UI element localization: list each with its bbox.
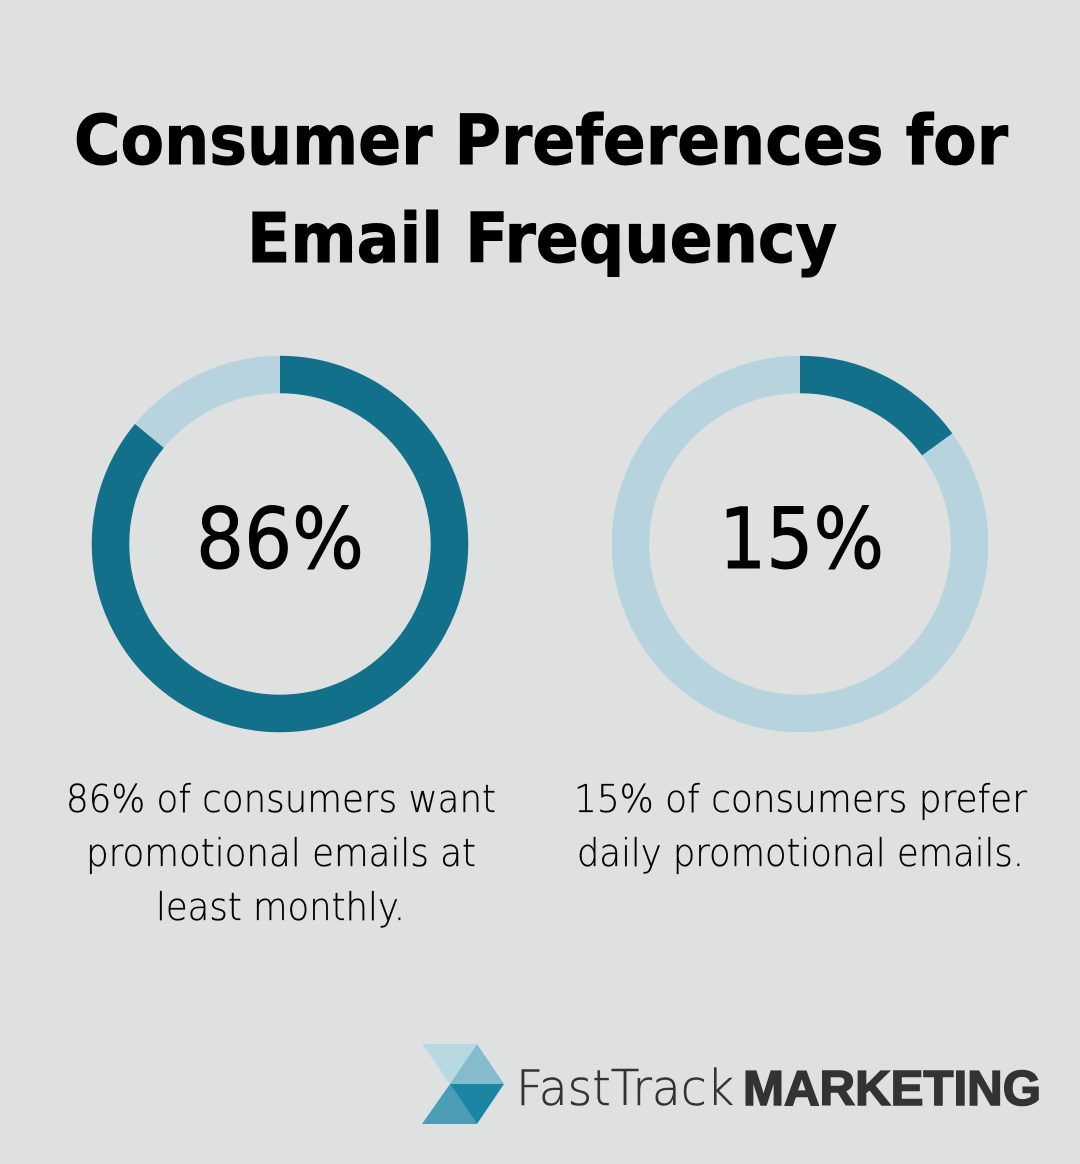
- text: 86% description: 86% of consumers want: [66, 777, 496, 821]
- panel: 15% daily: [574, 374, 1027, 875]
- stat: 15%: 15%: [719, 490, 884, 588]
- icon: logo mark: [422, 1044, 504, 1124]
- title: [74, 101, 1008, 279]
- text: 86% description: least monthly.: [156, 885, 405, 929]
- text: 15% description: 15% of consumers prefer: [574, 777, 1027, 821]
- logo text: FastTrack: [516, 1060, 734, 1117]
- panel: 86% monthly: [66, 374, 496, 929]
- logo text: [516, 1060, 1041, 1117]
- title: Email Frequency: [247, 199, 837, 279]
- text: 15% description: daily promotional emails.: [577, 831, 1024, 875]
- logo text: MARKETING: [743, 1062, 1041, 1116]
- donut chart: 86%: [110, 374, 450, 714]
- text: 15% description: [574, 777, 1027, 875]
- text: 86% description: [66, 777, 496, 929]
- stat: 86%: 86%: [196, 490, 364, 588]
- donut chart: 15%: [630, 374, 970, 714]
- logo: FastTrack Marketing: [422, 1044, 1041, 1124]
- title: Consumer Preferences for: [74, 101, 1008, 181]
- text: 86% description: promotional emails at: [86, 831, 476, 875]
